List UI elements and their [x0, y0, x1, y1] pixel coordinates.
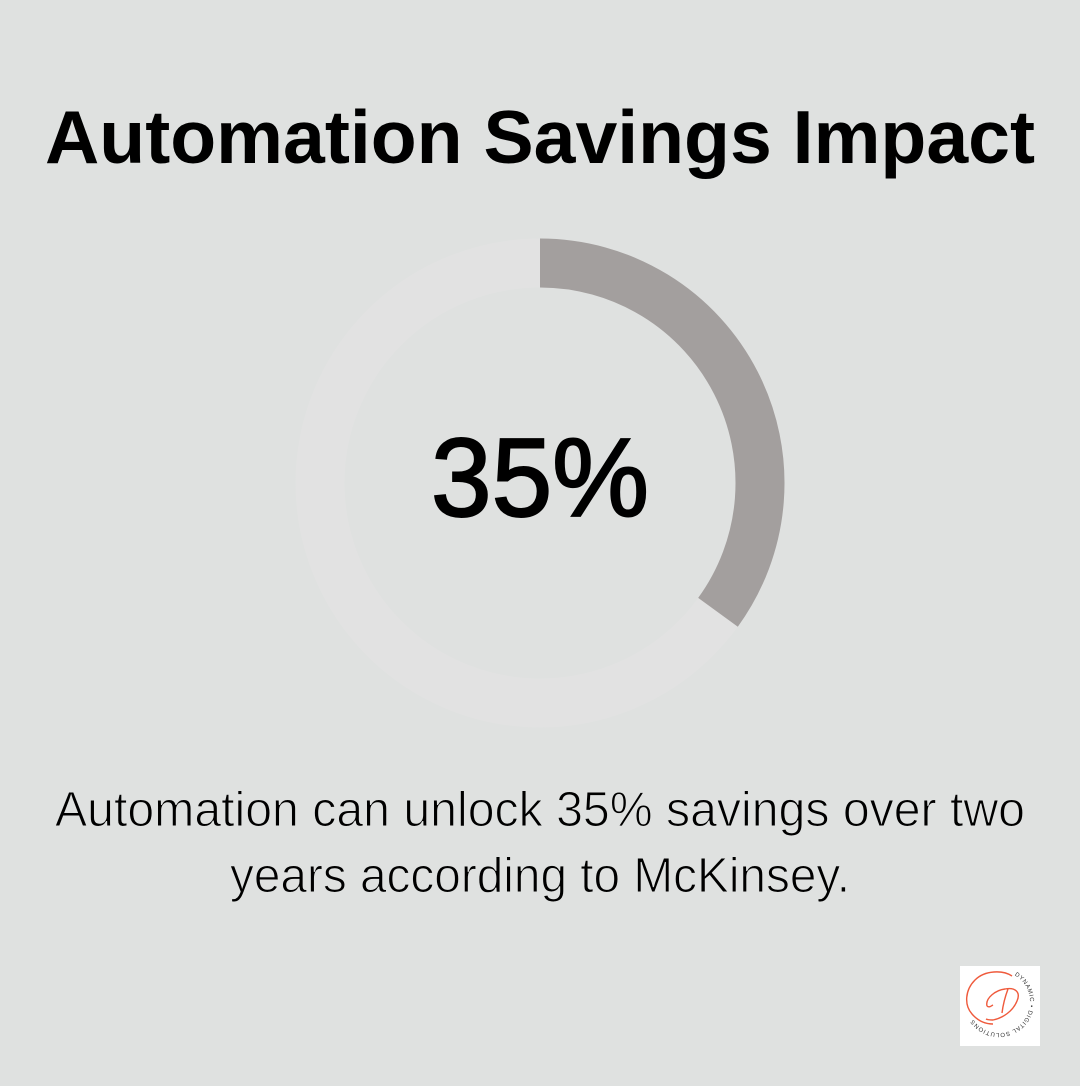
- logo monogram: [986, 989, 1018, 1020]
- logo background: [960, 966, 1040, 1046]
- description text: Automation can unlock 35% savings over two: [55, 783, 1025, 837]
- title: Automation Savings Impact: [45, 95, 1035, 179]
- description text: [55, 783, 1025, 903]
- description text: years according to McKinsey.: [230, 849, 850, 903]
- logo: Dynamic Digital Solutions: [960, 966, 1040, 1046]
- donut chart: 35%: [320, 263, 760, 703]
- donut value arc: [540, 263, 760, 612]
- center value: 35%: [431, 416, 649, 540]
- donut track: [320, 263, 760, 703]
- logo: Dynamic Digital Solutions: DYNAMIC • DIGITAL SOLUTIONS: [970, 972, 1034, 1038]
- logo ring: [967, 972, 1012, 1024]
